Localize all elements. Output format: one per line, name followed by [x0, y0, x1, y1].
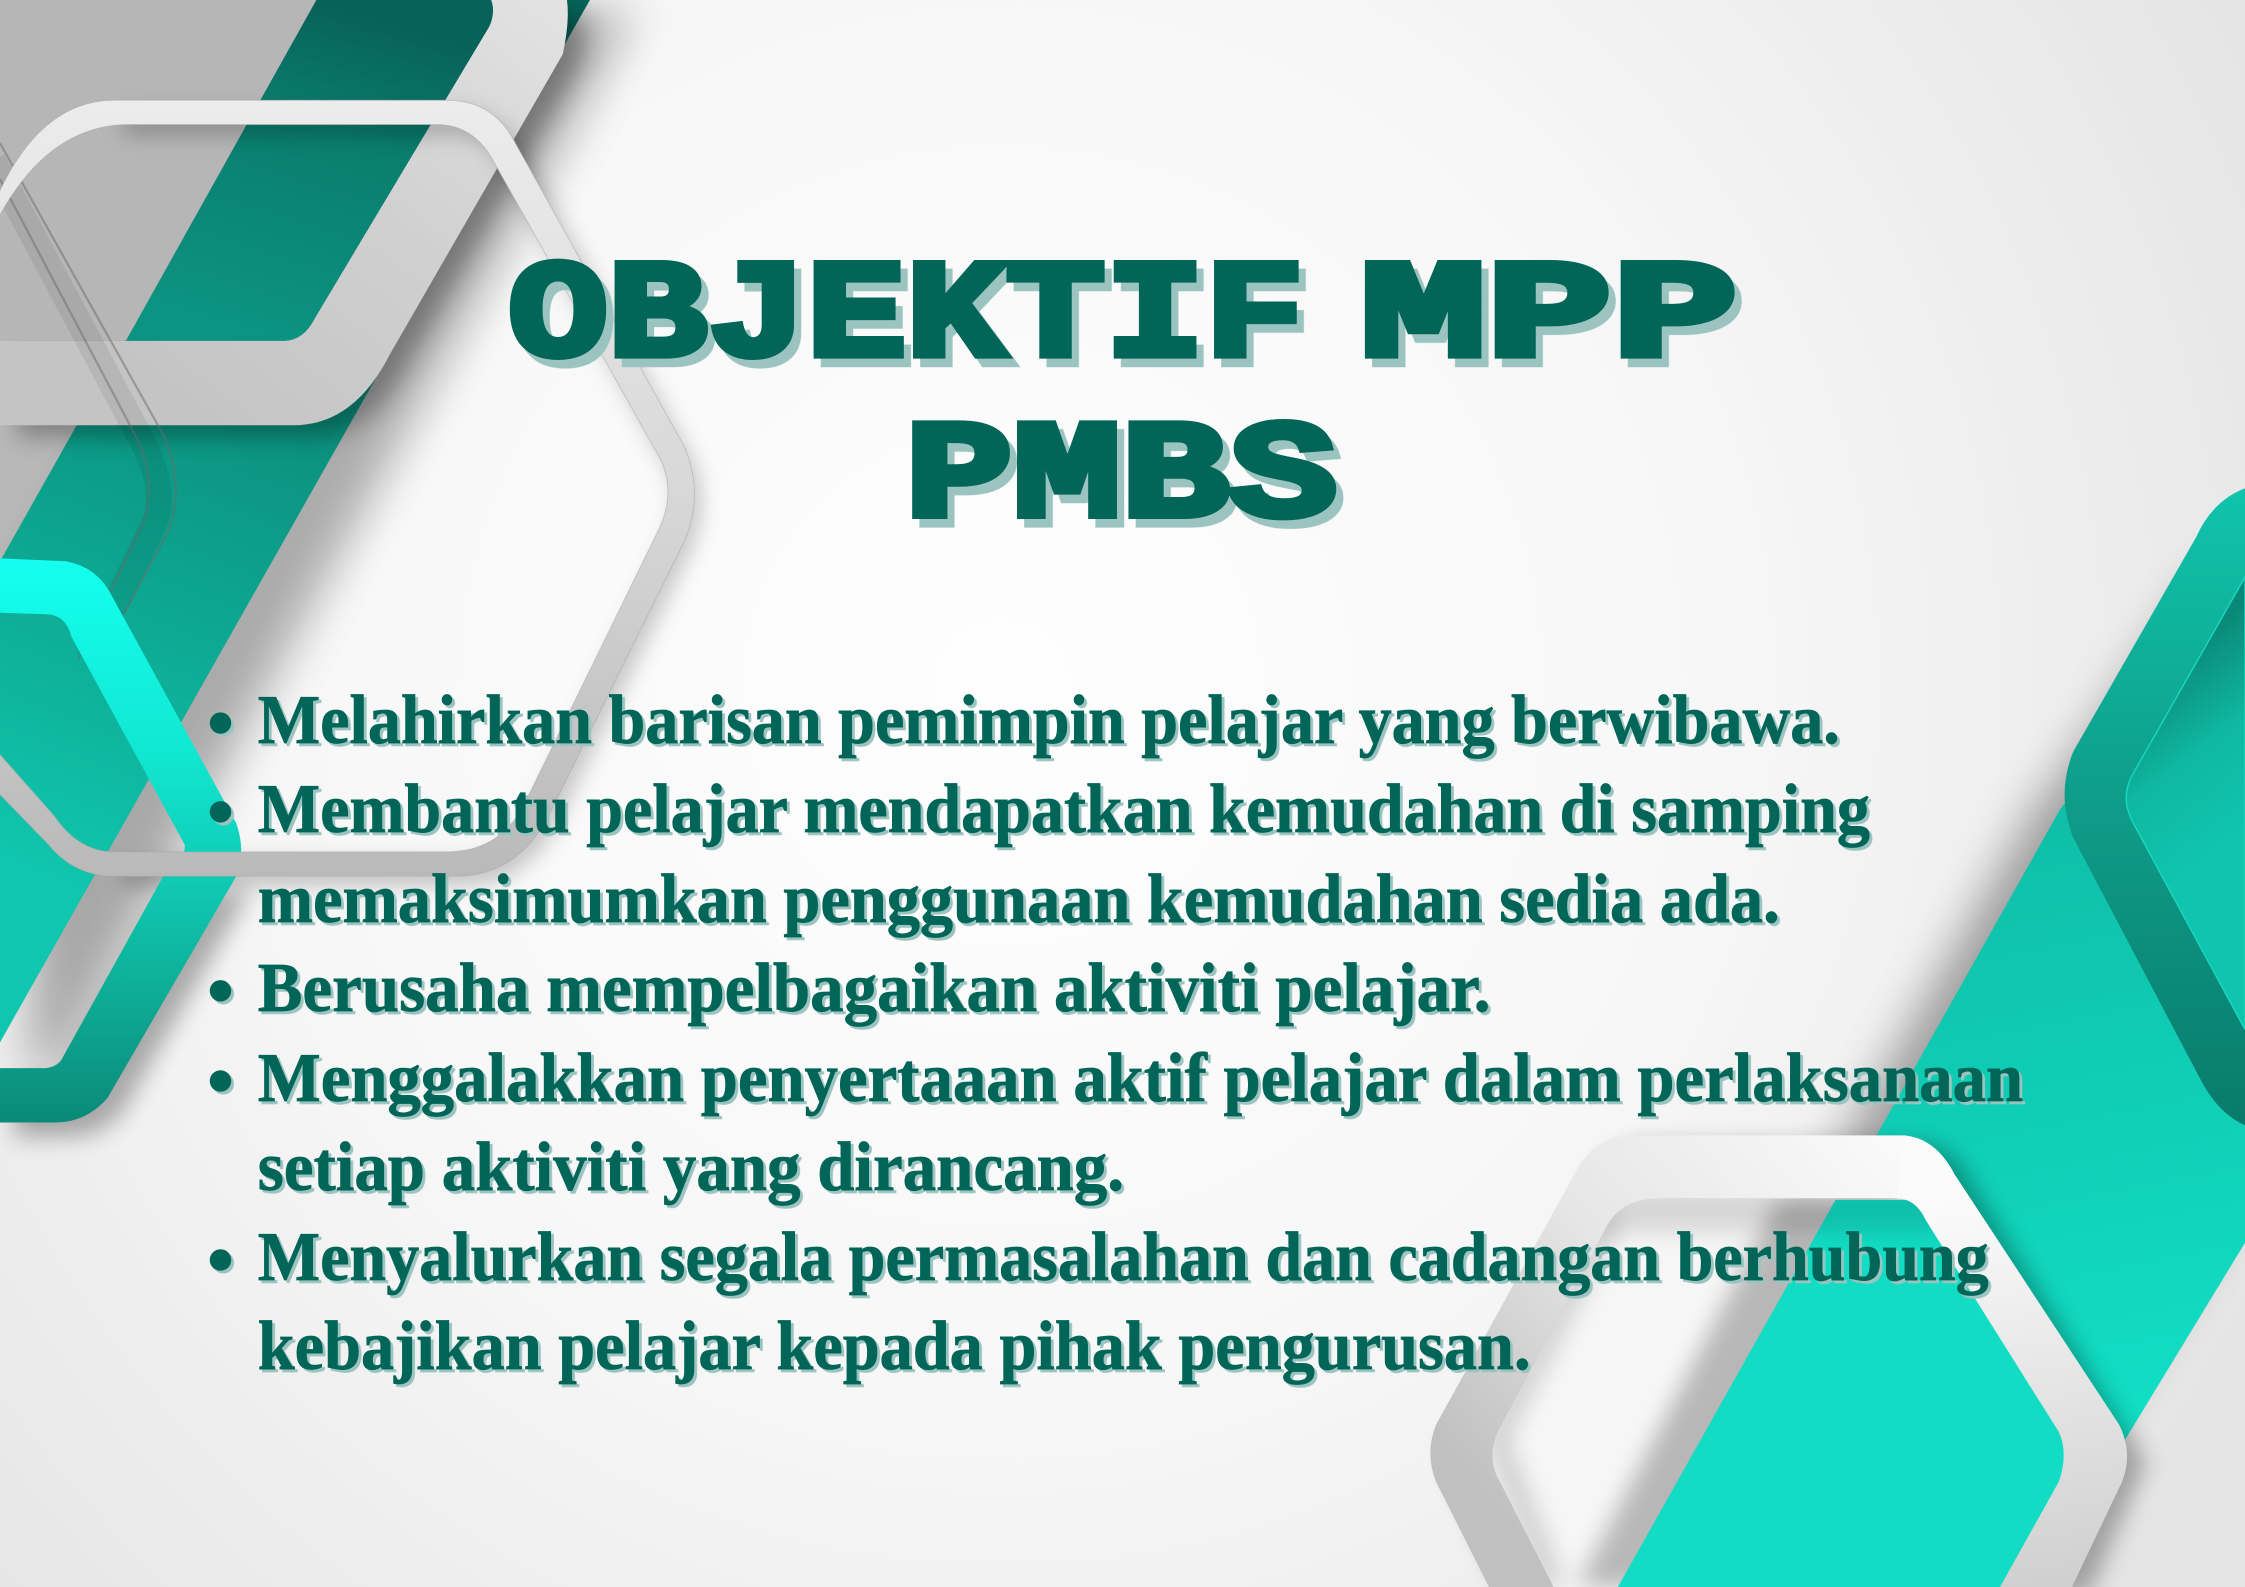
- ring hole top shade: [1475, 1188, 2090, 1231]
- title: [508, 239, 1738, 557]
- cyan ring shadow: [14, 891, 251, 1137]
- bottom-right white hexagon ring: [1430, 1135, 2127, 1587]
- decoration: top-left shapes: [0, 0, 694, 1137]
- bullet list: [210, 681, 2023, 1385]
- bullet item 4: setiap aktiviti yang dirancang.: [258, 1128, 1124, 1206]
- right hexagon ring: [2065, 488, 2245, 1125]
- bullet item 5: kebajikan pelajar kepada pihak pengurusan.: [258, 1307, 1531, 1385]
- bullet item 4: [210, 1039, 2023, 1206]
- bullet item 2: memaksimumkan penggunaan kemudahan sedia ada.: [258, 860, 1780, 938]
- title line 1: OBJEKTIF: [508, 239, 1304, 397]
- thin ring body: [0, 160, 159, 659]
- grey area left of band: [0, 340, 124, 558]
- grey plate shadow: [17, 11, 585, 437]
- bullet item 5: Menyalurkan segala permasalahan dan cadangan berhubung: [258, 1218, 1989, 1296]
- bullet item 2: Membantu pelajar mendapatkan kemudahan di samping: [258, 770, 1870, 848]
- white ring shadow: [123, 123, 688, 873]
- right diagonal teal band: [1622, 573, 2245, 1587]
- ring hole band shadow: [1578, 1200, 1896, 1586]
- decoration: right band and hexagons: [1430, 488, 2245, 1587]
- left band shadow: [31, 11, 633, 1071]
- right hexagon interior: [2126, 577, 2245, 1029]
- bullet item 2: [210, 770, 1870, 938]
- right band shadow: [1594, 561, 2216, 1575]
- thin ring edges: [0, 143, 176, 659]
- teal band strip in plate hole: [126, 0, 493, 341]
- bottom-right ring right side: [1897, 1135, 2127, 1587]
- bottom-right ring shadow: [1448, 1144, 2146, 1587]
- bullet item 1: Melahirkan barisan pemimpin pelajar yang berwibawa.: [258, 681, 1840, 759]
- title line 2: PMBS: [905, 399, 1337, 557]
- bullet item 5: [210, 1218, 1989, 1385]
- ring hole left shade: [1496, 1217, 1611, 1586]
- ring hole teal: [1618, 1200, 2076, 1587]
- bullet item 4: Menggalakkan penyertaaan aktif pelajar dalam perlaksanaan: [258, 1039, 2023, 1117]
- grey inner fill above plate bottom: [0, 0, 316, 341]
- white hexagon ring outline: [0, 100, 694, 876]
- title line 1: MPP: [1360, 239, 1738, 397]
- title line 1: [508, 239, 1738, 397]
- translucent thin ring: [0, 143, 176, 659]
- ring hole background: [1475, 1188, 2090, 1587]
- left diagonal teal band: [0, 0, 590, 1042]
- grey hexagon plate: [0, 0, 568, 425]
- bullet item 3: Berusaha mempelbagaikan aktiviti pelajar.: [258, 949, 1490, 1027]
- light panel behind ring hole: [1475, 1188, 2090, 1587]
- cyan hexagon ring: [0, 558, 241, 1123]
